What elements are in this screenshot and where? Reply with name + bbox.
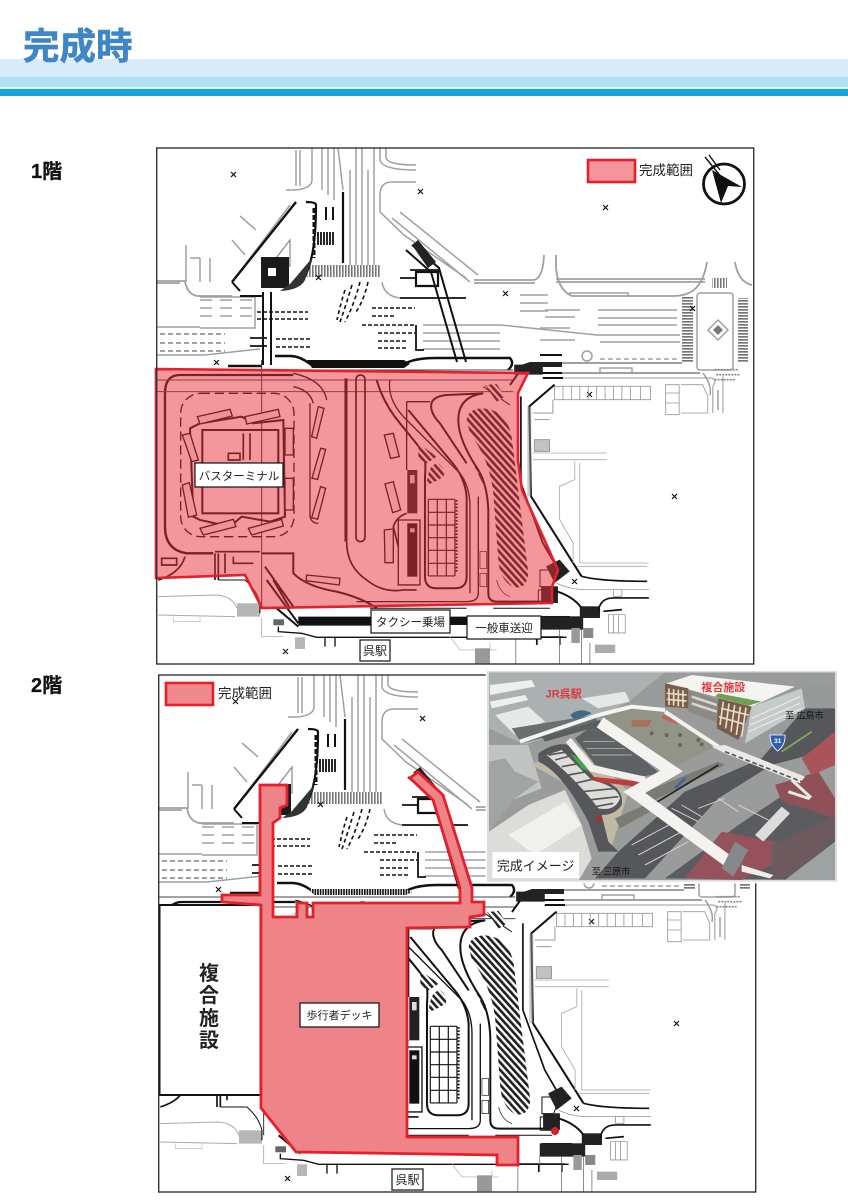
route 31 sign: 31 [774,738,782,745]
label: Kure station: 呉駅 [363,644,387,658]
heading: 2nd floor: 2階 [31,674,62,697]
label: to Hiroshima: 至 広島市 [785,709,824,720]
label: Kure station [360,640,390,661]
label: pedestrian deck [300,1003,379,1027]
label: completed image [492,852,579,878]
panel: 2nd floor plan [158,675,756,1192]
legend [166,683,272,705]
complex facility building [745,688,805,743]
pedestrian deck [520,707,665,742]
building block: complex facility: 合 [199,984,219,1007]
panel: completed image inset [486,671,838,883]
completion area overlay [156,369,558,608]
label: private car drop-off: 一般車送迎 [475,621,533,635]
legend [588,160,693,182]
label: JR Kure station: JR呉駅 [546,687,582,700]
legend: 完成範囲 [218,686,272,701]
label: taxi stand: タクシー乗場 [376,616,445,629]
building block: complex facility: 複 [199,962,219,985]
road plan drawing [159,675,754,1192]
aerial rendering [489,672,835,880]
header band [0,59,848,96]
label: complex facility: 複合施設 [701,680,745,694]
label: Kure station: 呉駅 [395,1173,420,1187]
road plan drawing [157,148,752,665]
label: Kure station [392,1169,423,1190]
label: bus terminal: バスターミナル [199,470,279,483]
label: taxi stand [371,610,450,633]
label: to Mihara: 至 三原市 [592,866,630,877]
route 31 sign [770,735,785,751]
bus terminal roads [538,744,622,852]
label: completed image: 完成イメージ [497,859,574,874]
building block: complex facility: 設 [199,1029,219,1052]
panel: 1st floor plan [156,148,754,665]
building block: complex facility [160,905,260,1095]
label: pedestrian deck: 歩行者デッキ [306,1008,372,1022]
plaza [600,708,718,768]
icon: north compass [704,155,744,204]
heading: 1st floor: 1階 [31,160,62,183]
title: 完成時 [23,26,132,67]
intersection road [595,708,835,878]
completion area: pedestrian deck [222,772,518,1165]
building block: complex facility: 施 [199,1007,219,1030]
legend: 完成範囲 [639,163,693,178]
label: private car drop-off [467,616,541,639]
label: bus terminal [195,463,283,487]
